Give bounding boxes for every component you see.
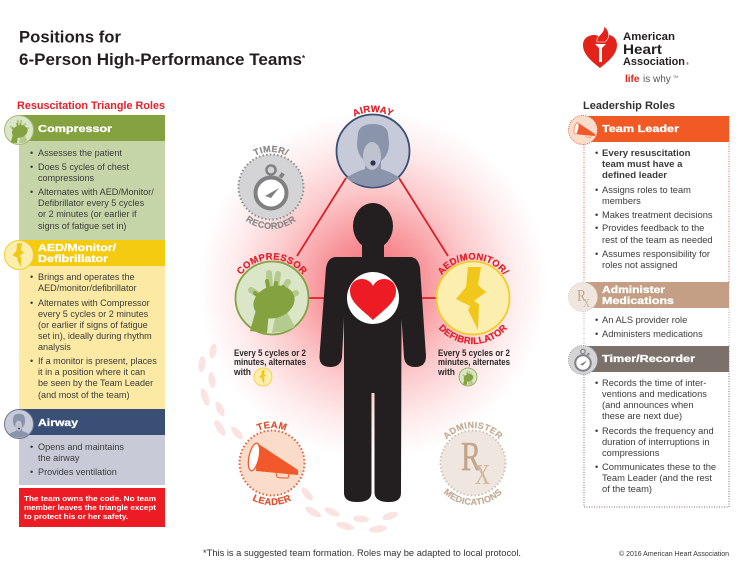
caption: compressor alternates: minutes, alternates xyxy=(234,356,306,367)
header: Compressor xyxy=(19,115,165,141)
icon: small hand xyxy=(459,368,477,386)
background glow xyxy=(198,110,548,460)
AED duties xyxy=(30,272,157,400)
caption: AED alternates xyxy=(437,347,510,386)
arc label: Leader: LEADER xyxy=(252,494,292,506)
team leader duties: members xyxy=(602,196,641,206)
role circle: Airway xyxy=(336,105,410,188)
team leader duties: Every resuscitation xyxy=(602,148,691,159)
caption: compressor alternates xyxy=(233,347,306,386)
title xyxy=(19,28,306,69)
icon: compressor hands xyxy=(4,116,34,144)
triangle connector lines xyxy=(297,178,448,298)
compressor duties: Does 5 cycles of chest xyxy=(38,162,129,172)
airway duties: Provides ventilation xyxy=(38,467,117,477)
icon: heart and torch xyxy=(583,26,617,68)
role circle: AED/Monitor/Defibrillator xyxy=(436,252,510,344)
team leader duties: team must have a xyxy=(602,159,683,170)
AED duties: set in), ideally during rhythm xyxy=(38,331,152,341)
header label: Airway xyxy=(38,418,79,429)
heading: Leadership Roles: Leadership Roles xyxy=(583,100,675,112)
panel: Administer Medications xyxy=(568,282,729,346)
panel: Compressor xyxy=(4,115,165,240)
header: Team Leader xyxy=(585,116,729,142)
title: Positions for xyxy=(19,28,122,46)
compressor duties: • xyxy=(30,187,33,197)
team leader duties: • xyxy=(595,148,598,158)
team leader duties: roles not assigned xyxy=(602,260,677,270)
AED duties: (or earlier if signs of fatigue xyxy=(38,320,148,330)
timer duties xyxy=(595,378,716,494)
compressor duties: or 2 minutes (or earlier if xyxy=(38,209,137,219)
role circle: Administer Medications xyxy=(440,422,506,506)
timer duties: • xyxy=(595,378,598,388)
body silhouette xyxy=(319,203,426,502)
title: * xyxy=(302,54,306,63)
compressor duties: Alternates with AED/Monitor/ xyxy=(38,187,154,197)
compressor duties: signs of fatigue set in) xyxy=(38,221,126,231)
role circle: Compressor xyxy=(234,252,310,336)
team leader duties: • xyxy=(595,210,598,220)
arc label: Compressor: COMPRESSOR xyxy=(237,252,307,275)
team leader duties: • xyxy=(595,249,598,259)
arc label: Airway: AIRWAY xyxy=(354,105,394,117)
role circle: Timer/Recorder xyxy=(238,146,304,230)
compressor duties: • xyxy=(30,162,33,172)
tagline: TM xyxy=(673,75,678,79)
icon: Rx: R xyxy=(461,433,481,479)
panel: Timer/Recorder xyxy=(568,346,729,507)
arc label: Medications: MEDICATIONS xyxy=(444,488,502,506)
icon: small bolt xyxy=(254,368,272,386)
compressor duties: Assesses the patient xyxy=(38,148,122,158)
copyright: © 2016 American Heart Association xyxy=(619,549,729,558)
arc label: Defibrillator: DEFIBRILLATOR xyxy=(438,324,508,344)
header label: Administer xyxy=(602,285,665,296)
logo wordmark: Association xyxy=(623,56,685,68)
panel: AED/Monitor/Defibrillator xyxy=(4,240,165,409)
AED duties: be seen by the Team Leader xyxy=(38,378,153,388)
arc label: Team: TEAM xyxy=(256,421,287,430)
timer duties: ventions and medications xyxy=(602,389,707,399)
AED duties: If a monitor is present, places xyxy=(38,356,157,366)
airway duties: Opens and maintains xyxy=(38,442,124,452)
arc label: Administer: ADMINISTER xyxy=(444,422,502,440)
timer duties: • xyxy=(595,462,598,472)
team leader duties: • xyxy=(595,185,598,195)
callout: team owns the code: to protect his or her safety. xyxy=(24,512,128,521)
tagline: life xyxy=(625,74,640,85)
header label xyxy=(38,243,116,265)
panel: Airway xyxy=(4,409,165,485)
icon: heart xyxy=(347,272,399,324)
panel: Team Leader xyxy=(568,116,729,282)
compressor duties xyxy=(30,148,154,231)
timer duties: • xyxy=(595,426,598,436)
AED duties: • xyxy=(30,356,33,366)
AED duties: AED/monitor/defibrillator xyxy=(38,283,137,293)
callout: team owns the code: The team owns the code. No team xyxy=(24,494,156,503)
caption: compressor alternates: with xyxy=(233,366,251,377)
title: 6-Person High-Performance Teams xyxy=(19,51,302,69)
timer duties: Team Leader (and the rest xyxy=(602,472,712,483)
AED duties: Brings and operates the xyxy=(38,272,135,282)
administer duties: Administers medications xyxy=(602,329,703,339)
header label: Medications xyxy=(602,296,675,307)
AED duties: it in a position where it can xyxy=(38,367,145,377)
timer duties: these are next due) xyxy=(602,411,682,421)
arc label: Recorder: RECORDER xyxy=(246,216,296,230)
header: Timer/Recorder xyxy=(585,346,729,372)
timer duties: compressions xyxy=(602,448,660,458)
tagline xyxy=(625,74,678,85)
tagline: is why xyxy=(643,74,671,85)
caption: AED alternates: Every 5 cycles or 2 xyxy=(438,347,510,358)
team leader duties: Provides feedback to the xyxy=(602,223,704,233)
caption: AED alternates: with xyxy=(437,366,455,377)
AED duties: (and most of the team) xyxy=(38,390,129,400)
icon: Rx xyxy=(568,282,598,312)
header label xyxy=(602,285,675,307)
callout: team owns the code xyxy=(19,488,165,527)
AED duties: • xyxy=(30,298,33,308)
AED duties: analysis xyxy=(38,342,71,352)
administer duties: • xyxy=(595,329,598,339)
logo wordmark xyxy=(623,31,689,68)
logo wordmark: American xyxy=(623,31,675,43)
footprints path xyxy=(198,343,399,534)
AED duties: • xyxy=(30,272,33,282)
header label: Compressor xyxy=(38,124,112,135)
administer duties xyxy=(595,315,703,339)
compressor duties: compressions xyxy=(38,173,95,183)
callout: team owns the code: member leaves the triangle except xyxy=(24,503,156,512)
footnote: *This is a suggested team formation. Roles may be adapted to local protocol. xyxy=(203,548,521,559)
airway duties: the airway xyxy=(38,453,80,463)
header: AED xyxy=(19,240,165,266)
icon: megaphone xyxy=(568,116,598,144)
role circle: Team Leader xyxy=(238,421,306,506)
timer duties: Communicates these to the xyxy=(602,461,716,472)
caption: AED alternates: minutes, alternates xyxy=(438,356,510,367)
logo: American Heart Association xyxy=(583,26,689,85)
team leader duties xyxy=(595,148,713,270)
logo wordmark: ® xyxy=(686,61,689,66)
icon: Rx: R xyxy=(577,286,587,305)
icon: stopwatch xyxy=(568,346,598,374)
administer duties: An ALS provider role xyxy=(602,315,687,325)
compressor duties: • xyxy=(30,148,33,158)
airway duties xyxy=(30,442,124,477)
header: Administer Medications xyxy=(585,282,729,308)
timer duties: Records the frequency and xyxy=(602,426,714,436)
airway duties: • xyxy=(30,442,33,452)
timer duties: (and announces when xyxy=(602,400,694,410)
timer duties: Records the time of inter- xyxy=(602,378,706,388)
AED duties: Alternates with Compressor xyxy=(38,298,150,308)
AED duties: every 5 cycles or 2 minutes xyxy=(38,309,149,319)
team leader duties: rest of the team as needed xyxy=(602,235,713,245)
header label: Timer/Recorder xyxy=(602,354,695,365)
team leader duties: Assumes responsibility for xyxy=(602,249,710,259)
airway duties: • xyxy=(30,467,33,477)
timer duties: duration of interruptions in xyxy=(602,437,710,447)
team leader duties: Assigns roles to team xyxy=(602,185,691,195)
timer duties: of the team) xyxy=(602,483,652,494)
team leader duties: Makes treatment decisions xyxy=(602,210,713,220)
administer duties: • xyxy=(595,315,598,325)
team leader duties: • xyxy=(595,223,598,233)
icon: airway face xyxy=(4,410,34,438)
icon: lightning bolt xyxy=(4,240,34,270)
icon: Rx: x xyxy=(583,292,590,311)
header label: Team Leader xyxy=(602,124,679,135)
arc label: AED/Monitor: AED/MONITOR/ xyxy=(438,252,510,276)
logo wordmark: Heart xyxy=(623,41,662,57)
header label: Defibrillator xyxy=(38,254,108,265)
heading: Resuscitation Triangle Roles: Resuscitation Triangle Roles xyxy=(17,100,165,112)
icon: Rx: x xyxy=(475,447,490,493)
arc label: Timer: TIMER/ xyxy=(252,146,290,156)
header label: AED/Monitor/ xyxy=(38,243,116,254)
team leader duties: defined leader xyxy=(602,170,667,181)
caption: compressor alternates: Every 5 cycles or 2 xyxy=(234,347,306,358)
compressor duties: Defibrillator every 5 cycles xyxy=(38,198,145,208)
header: Airway xyxy=(19,409,165,435)
